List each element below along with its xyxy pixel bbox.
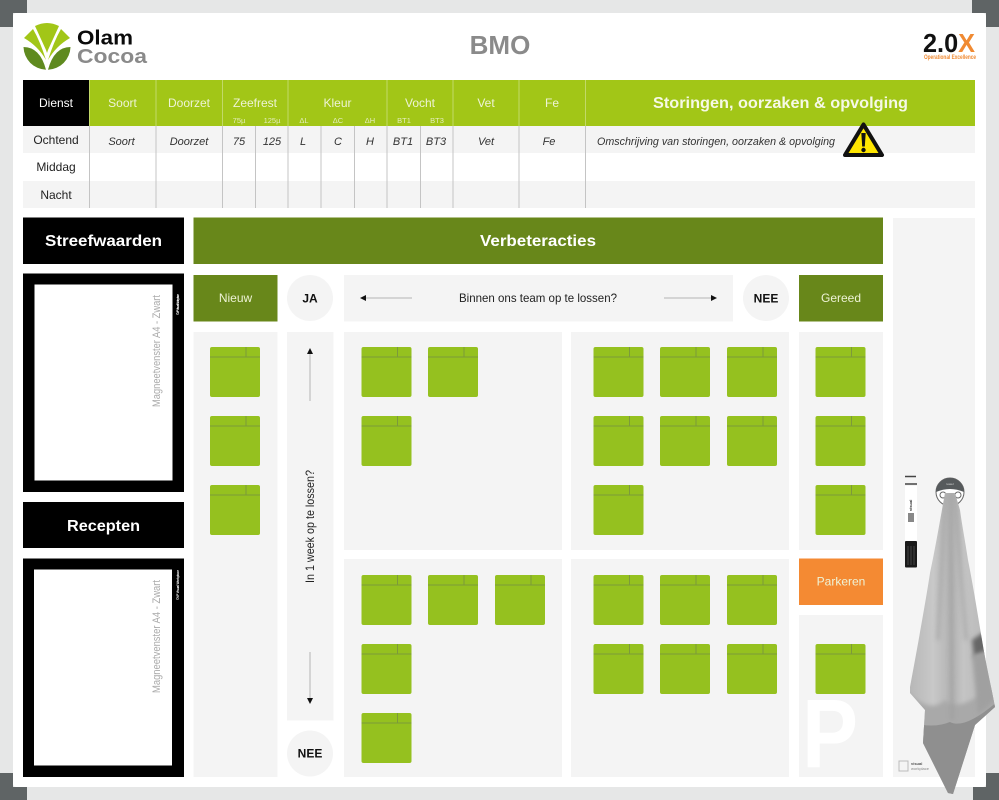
logo: Olam Cocoa xyxy=(24,23,148,70)
panel: quadrant JA / NEE xyxy=(571,332,789,550)
heading: Recepten: Recepten xyxy=(67,518,140,535)
table header xyxy=(23,80,975,126)
column header: Parkeren xyxy=(799,558,883,605)
table header: Storingen, oorzaken & opvolging xyxy=(653,95,908,112)
logo: 2.0X operational excellence: 2.0X xyxy=(923,28,976,58)
table rows: H xyxy=(366,136,374,148)
arrow: left xyxy=(360,295,412,301)
table rows: 75 xyxy=(233,136,246,148)
magnetic window A4: ©VP Visual Workplace xyxy=(176,570,180,600)
logo: visual workplace xyxy=(899,761,930,771)
vertical axis: In 1 week op te lossen: In 1 week op te lossen? xyxy=(303,470,317,583)
column header: Gereed xyxy=(799,275,883,322)
logo: visual workplace: workplace xyxy=(911,766,930,771)
badge: NEE bottom xyxy=(287,730,333,776)
magnetic window A4 xyxy=(23,274,184,492)
panel: Nieuw column xyxy=(194,332,278,777)
heading: Verbeteracties xyxy=(194,218,883,264)
table rows: Fe xyxy=(543,136,555,148)
panel: Streefwaarden xyxy=(23,218,184,492)
table header: Vet xyxy=(477,96,495,110)
table rows: C xyxy=(334,136,342,148)
panel: quadrant NEE / JA xyxy=(344,559,562,777)
magnetic window A4: Magneetvenster A4 - Zwart xyxy=(151,295,163,407)
heading: Streefwaarden: Streefwaarden xyxy=(45,233,162,250)
column header: Nieuw xyxy=(194,275,278,322)
table header: BT1 xyxy=(397,116,411,125)
heading: Recepten xyxy=(23,502,184,548)
icon: leaves xyxy=(24,23,70,70)
logo: visual workplace: visual xyxy=(911,761,922,766)
logo: Olam Cocoa: Olam xyxy=(77,28,133,50)
badge: NEE top xyxy=(743,275,789,321)
column header: Parkeren: Parkeren xyxy=(817,574,865,588)
magnetic window A4 xyxy=(23,558,184,777)
table header: 75µ xyxy=(233,116,246,125)
table header: Doorzet xyxy=(168,96,211,110)
icon: whiteboard marker: visual xyxy=(908,500,913,511)
badge: NEE top: NEE xyxy=(754,292,778,306)
heading: Streefwaarden xyxy=(23,218,184,264)
vertical axis: In 1 week op te lossen xyxy=(287,332,334,720)
table rows xyxy=(23,126,975,208)
table rows: Middag xyxy=(36,160,76,174)
arrow: down xyxy=(307,652,313,704)
table: shift log xyxy=(23,80,975,208)
table rows: 125 xyxy=(263,136,282,148)
column header: Gereed: Gereed xyxy=(821,291,861,305)
table header: BT3 xyxy=(430,116,444,125)
table header: Kleur xyxy=(323,96,352,110)
table rows: Soort xyxy=(108,136,136,148)
panel: quadrant NEE / NEE xyxy=(571,559,789,777)
table rows: Omschrijving van storingen, oorzaken & opvolging xyxy=(597,136,836,148)
table header: ΔL xyxy=(299,116,309,125)
horizontal axis: Binnen ons team op te lossen xyxy=(344,275,733,322)
icon: whiteboard marker xyxy=(905,476,917,568)
icon: towel hook: towel xyxy=(946,482,954,486)
column header: Nieuw: Nieuw xyxy=(219,291,252,305)
panel: Gereed column xyxy=(799,332,883,550)
heading: Verbeteracties: Verbeteracties xyxy=(480,233,596,250)
table header: ΔC xyxy=(333,116,344,125)
title: BMO xyxy=(470,30,530,60)
panel: side strip xyxy=(893,218,975,777)
table header: Zeefrest xyxy=(233,96,278,110)
table header: Dienst xyxy=(39,96,74,110)
arrow: right xyxy=(664,295,717,301)
table rows: Vet xyxy=(478,136,495,148)
icon: warning triangle xyxy=(845,124,882,155)
badge: JA xyxy=(287,275,333,321)
table rows: L xyxy=(300,136,306,148)
logo: 2.0X operational excellence: Operational Excellence xyxy=(924,55,977,61)
icon: hanging towel xyxy=(910,493,995,794)
logo: Olam Cocoa: Cocoa xyxy=(77,46,148,68)
table rows: Ochtend xyxy=(33,133,79,147)
table header: Fe xyxy=(545,96,559,110)
horizontal axis: Binnen ons team op te lossen: Binnen ons team op te lossen? xyxy=(459,291,617,305)
arrow: up xyxy=(307,348,313,401)
table rows: Nacht xyxy=(40,188,72,202)
table rows: BT1 xyxy=(393,136,413,148)
panel: Parkeren column xyxy=(799,615,883,788)
magnetic window A4: Magneetvenster A4 - Zwart xyxy=(151,580,163,693)
icon: towel hook xyxy=(936,478,964,506)
badge: JA: JA xyxy=(302,292,318,306)
table header: Vocht xyxy=(405,96,436,110)
table header: 125µ xyxy=(264,116,281,125)
table rows: BT3 xyxy=(426,136,447,148)
table header: ΔH xyxy=(365,116,375,125)
panel: Parkeren column: P xyxy=(802,679,858,788)
magnetic window A4: ©VP Visual Workplace xyxy=(176,294,180,315)
table header: Soort xyxy=(108,96,138,110)
badge: NEE bottom: NEE xyxy=(298,746,322,760)
table rows: Doorzet xyxy=(170,136,209,148)
panel: quadrant JA / JA xyxy=(344,332,562,550)
panel: Recepten xyxy=(23,502,184,777)
